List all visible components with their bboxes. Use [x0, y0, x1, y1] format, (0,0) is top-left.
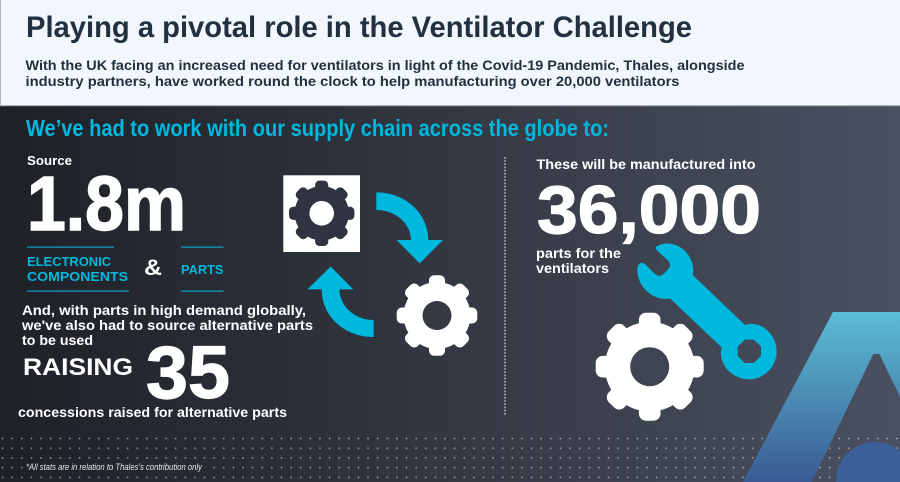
- dotted divider: [504, 157, 506, 415]
- raising label: RAISING: [23, 354, 133, 381]
- arrow: top right: [376, 192, 443, 263]
- alternative parts text: to be used: [22, 332, 93, 348]
- stat: 1.8m: 1.8m: [27, 161, 186, 247]
- electronic components label: ELECTRONIC: [27, 254, 112, 269]
- stat: 36,000: 36,000: [537, 172, 761, 248]
- footnote: *All stats are in relation to Thales's contribution only: [26, 462, 202, 472]
- alternative parts text: [21, 302, 313, 348]
- parts caption: [536, 245, 621, 276]
- alternative parts text: And, with parts in high demand globally,: [22, 302, 306, 318]
- intro text: With the UK facing an increased need for ventilators in light of the Covid-19 Pandemic, Thales, alongside: [26, 57, 745, 73]
- manufactured label: These will be manufactured into: [536, 156, 756, 172]
- icon: large white gear: [596, 313, 704, 421]
- icon: gear in white square: [283, 175, 360, 252]
- stat: 35: 35: [146, 331, 230, 414]
- electronic components label: COMPONENTS: [27, 269, 128, 284]
- header band: [0, 0, 900, 106]
- intro text: [26, 57, 745, 89]
- electronic components label: [27, 246, 129, 292]
- arrow: bottom left: [307, 267, 374, 337]
- concessions caption: concessions raised for alternative parts: [18, 404, 287, 420]
- parts caption: parts for the: [536, 245, 621, 261]
- title: Playing a pivotal role in the Ventilator Challenge: [26, 11, 692, 44]
- parts caption: ventilators: [536, 260, 609, 276]
- logo shape: [743, 312, 900, 482]
- ampersand: &: [144, 255, 162, 280]
- section heading: We’ve had to work with our supply chain across the globe to:: [26, 115, 609, 141]
- alternative parts text: we've also had to source alternative parts: [21, 317, 313, 333]
- intro text: industry partners, have worked round the clock to help manufacturing over 20,000 ventilators: [26, 73, 680, 89]
- icon: wrench: [637, 243, 777, 379]
- parts label: [181, 246, 224, 292]
- dark panel: [0, 106, 900, 482]
- dotted background band: [0, 434, 900, 482]
- icon: white gear: [397, 275, 477, 356]
- parts label: PARTS: [181, 262, 224, 277]
- stat: source label: Source: [27, 153, 72, 168]
